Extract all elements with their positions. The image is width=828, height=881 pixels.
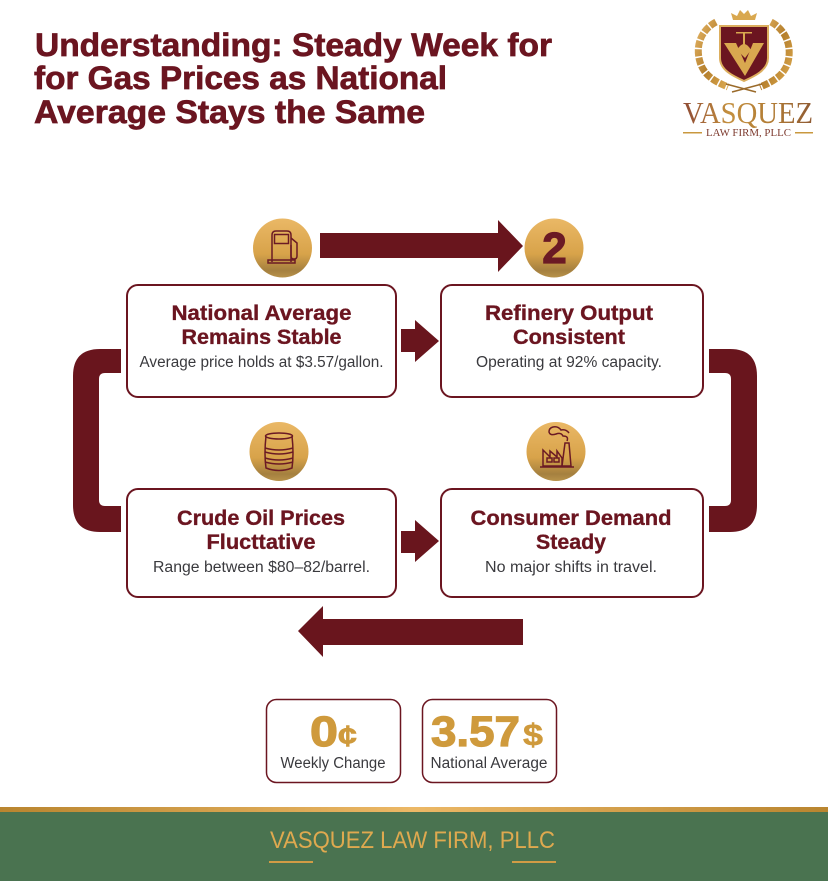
icon: number 2 bbox=[524, 218, 584, 278]
icon: laurel wreath bbox=[698, 22, 789, 87]
heading: Refinery Output bbox=[485, 301, 653, 325]
title bbox=[34, 27, 552, 130]
logo wordmark: VASQUEZ bbox=[683, 95, 813, 130]
heading: National Average bbox=[172, 301, 352, 325]
panel: refinery output: Consistent bbox=[513, 325, 625, 349]
stat value: 0 bbox=[310, 708, 338, 756]
stat label: National Average bbox=[430, 755, 548, 772]
arrow: top right bbox=[320, 220, 523, 272]
stat: national average bbox=[422, 700, 556, 782]
icon: V emblem bbox=[724, 43, 764, 76]
panel: consumer demand: Steady bbox=[536, 530, 606, 554]
title: Understanding: Steady Week for bbox=[35, 27, 552, 63]
description: Range between $80–82/barrel. bbox=[153, 559, 370, 576]
description: No major shifts in travel. bbox=[485, 559, 657, 576]
panel: crude oil: Flucttative bbox=[206, 530, 316, 554]
footer text: VASQUEZ LAW FIRM, PLLC bbox=[270, 827, 555, 854]
arrow: bottom left bbox=[298, 606, 523, 657]
description: Operating at 92% capacity. bbox=[476, 354, 662, 371]
stat label: Weekly Change bbox=[280, 755, 386, 772]
title: Average Stays the Same bbox=[34, 94, 425, 130]
arrow: card 3 to card 4 bbox=[401, 520, 439, 562]
arrow: left bracket bbox=[73, 349, 121, 532]
panel: crude oil bbox=[127, 489, 396, 597]
icon: oil barrel bbox=[250, 422, 308, 481]
title: for Gas Prices as National bbox=[34, 60, 447, 96]
panel: refinery output bbox=[441, 285, 703, 397]
panel: national average: Remains Stable bbox=[182, 325, 342, 349]
footer band bbox=[0, 807, 828, 881]
stat: weekly change bbox=[266, 700, 400, 782]
heading: Crude Oil Prices bbox=[177, 506, 345, 530]
arrow: card 1 to card 2 bbox=[401, 320, 439, 362]
panel: national average bbox=[127, 285, 396, 397]
icon: shield bbox=[720, 26, 768, 81]
icon: fuel pump bbox=[253, 218, 312, 278]
icon: factory bbox=[526, 422, 586, 481]
stat value: 3.57 bbox=[431, 708, 520, 756]
logo sub-line: LAW FIRM, PLLC bbox=[706, 128, 791, 139]
icon: crown bbox=[731, 10, 757, 20]
heading: Consumer Demand bbox=[470, 506, 672, 530]
stat: national average: $ bbox=[523, 717, 543, 752]
stat: weekly change: ¢ bbox=[338, 720, 357, 753]
panel: consumer demand bbox=[441, 489, 703, 597]
description: Average price holds at $3.57/gallon. bbox=[140, 354, 384, 371]
logo: Vasquez Law Firm bbox=[683, 10, 813, 139]
icon: number 2: 2 bbox=[542, 224, 567, 273]
arrow: right bracket bbox=[709, 349, 757, 532]
